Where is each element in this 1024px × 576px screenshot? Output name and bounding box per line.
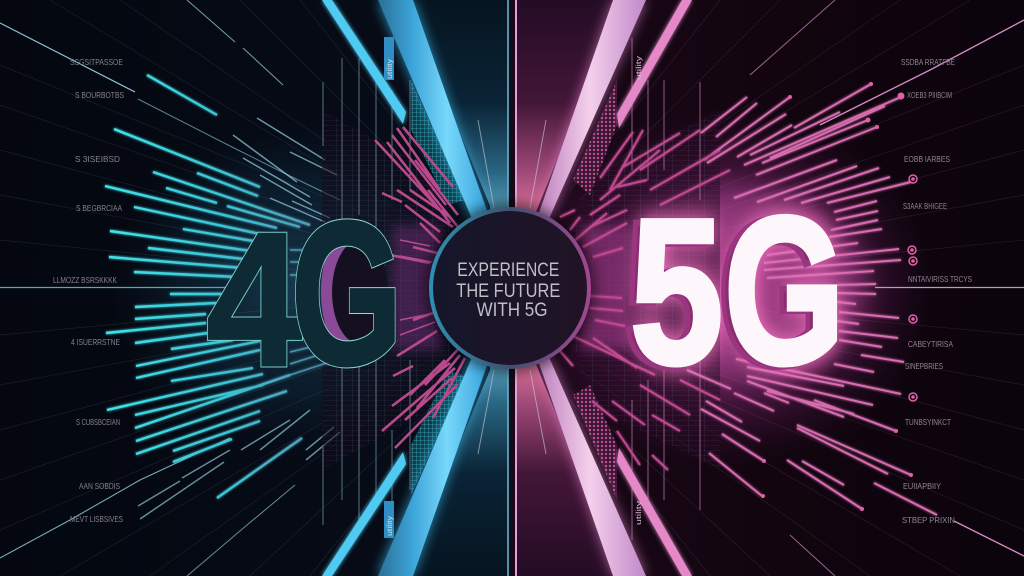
tiny vertical labels — [384, 37, 643, 538]
right side labels: NNTAIVIRISS TRCYS — [908, 274, 972, 284]
left side labels: LLMOZZ BSRSKKKK — [53, 275, 117, 285]
cyan speed bars: 4G — [105, 75, 360, 498]
tiny vertical labels: utility — [636, 500, 643, 525]
badge text: experience the future with 5G: WITH 5G — [476, 299, 548, 321]
heading: 5G: 5 — [623, 177, 716, 409]
heading: 4G — [207, 180, 403, 408]
tiny vertical labels: utility — [387, 515, 394, 536]
right side labels — [901, 57, 972, 525]
centre badge — [425, 203, 595, 373]
right side labels: EUIIAPBIIY — [903, 481, 941, 491]
heading: 4G: 4 — [207, 194, 302, 406]
heading: 4G: G — [291, 180, 403, 408]
pink speed bars: 5G — [560, 84, 937, 515]
left side labels: S 3ISEIBSD — [75, 154, 120, 164]
tiny vertical labels: utility — [636, 55, 643, 80]
heading: 5G — [623, 174, 845, 410]
bar end nodes — [761, 82, 917, 511]
right side labels: CABEYTIRISA — [908, 339, 953, 349]
heading: 4G: G — [291, 180, 403, 408]
right side labels: XOEB3 PIIIBCIM — [907, 90, 952, 100]
right side labels: S3AAK BHIGEE — [903, 201, 947, 211]
vertical guide lines — [323, 38, 700, 540]
mesh panel: cyan — [411, 80, 465, 495]
thin centre streaks — [478, 120, 546, 454]
tiny vertical labels: utility — [387, 58, 394, 79]
pink light beams — [516, 0, 692, 576]
heading: 5G: G — [724, 174, 845, 408]
heading: 5G: G — [717, 176, 838, 410]
left side labels: AAN SOBDIS — [79, 481, 120, 491]
left side labels: 4 ISUERRSTNE — [71, 337, 120, 347]
left side labels: S BEGBRCIAA — [76, 203, 122, 213]
heading: 5G: G — [724, 174, 845, 408]
centre core glow — [405, 0, 622, 576]
heading: 5G: 5 — [630, 175, 723, 407]
badge text: experience the future with 5G: THE FUTURE — [456, 280, 560, 302]
mesh panel: pink — [573, 80, 617, 500]
left side labels — [53, 57, 124, 524]
glow behind the speed lines — [110, 108, 935, 468]
right side labels: EOBB IARBES — [904, 154, 950, 164]
right side labels: STBEP PRIXIN — [902, 515, 955, 525]
heading: 5G: 5 — [630, 175, 723, 407]
left side labels: SSGSITPASSOE — [70, 57, 123, 67]
pink bright rays — [750, 0, 1024, 576]
grid panels around the centre — [322, 110, 720, 470]
heading: 4G: 4 — [207, 194, 302, 406]
pink sticks around the centre: left — [375, 127, 465, 448]
left side labels: S BOURBOTBS — [75, 90, 124, 100]
left side labels: MEVT LISBSIVES — [70, 514, 123, 524]
badge text: experience the future with 5G: EXPERIENCE — [457, 259, 559, 281]
bright thin rays: left — [0, 0, 340, 576]
right side labels: SSDBA RRATFBE — [901, 57, 955, 67]
right side labels: SINEPBRIES — [905, 361, 943, 371]
left side labels: S CUBSBCEIAN — [76, 417, 120, 427]
right side labels: TUNBSYINKCT — [905, 417, 951, 427]
blue light beams — [322, 0, 508, 576]
